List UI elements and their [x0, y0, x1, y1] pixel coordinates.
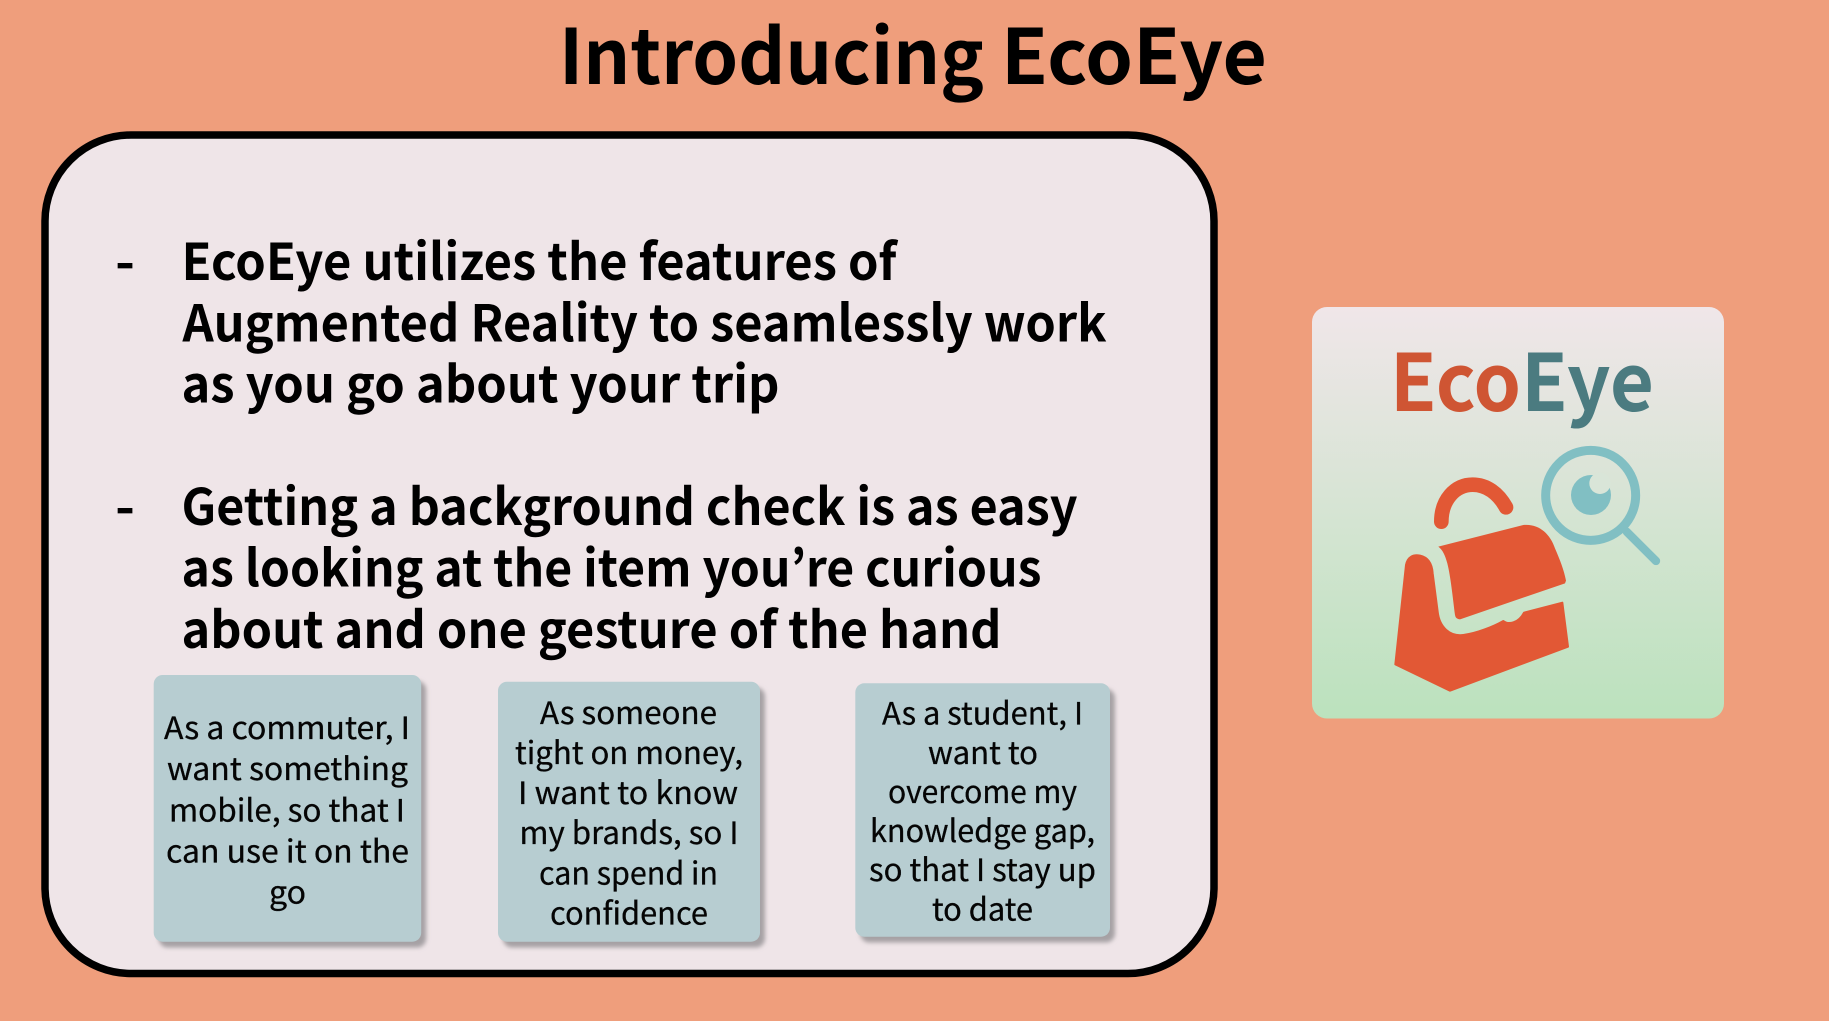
card: student user story: want to: [928, 728, 1038, 773]
text block: second bullet: Getting a background check is as easy: [182, 466, 1078, 540]
card: student user story: knowledge gap,: [870, 806, 1095, 851]
card: commuter user story: can use it on the: [166, 826, 409, 872]
text block: second bullet: -: [115, 466, 135, 540]
panel: main description: [45, 135, 1214, 974]
logo wordmark: EcoEye: [1390, 319, 1654, 434]
card: commuter user story: As a commuter, I: [164, 703, 410, 748]
card: student user story: to date: [932, 884, 1033, 930]
card: tight budget user story: my brands, so I: [520, 808, 738, 853]
text block: second bullet: [115, 466, 1078, 663]
card: tight budget user story: I want to know: [518, 768, 738, 813]
icon: magnifying glass with eye: [1546, 450, 1656, 561]
card: tight budget user story: tight on money,: [515, 728, 743, 773]
card: student user story: [855, 683, 1115, 942]
card: student user story: overcome my: [888, 767, 1077, 812]
title: [559, 0, 1267, 106]
card: commuter user story: want something: [167, 744, 409, 789]
text block: first bullet: as you go about your trip: [182, 344, 780, 418]
card: commuter user story: [154, 675, 426, 948]
logo card: [1312, 307, 1724, 718]
text block: second bullet: as looking at the item you’re curious: [182, 528, 1042, 602]
card: student user story: As a student, I: [882, 688, 1083, 734]
card: tight budget user story: confidence: [550, 888, 708, 934]
text block: second bullet: about and one gesture of the hand: [182, 589, 1002, 663]
icon: handbag: [1395, 485, 1568, 691]
card: tight budget user story: [498, 682, 765, 948]
text block: first bullet: -: [115, 221, 135, 295]
text block: first bullet: [115, 221, 1107, 418]
text block: first bullet: EcoEye utilizes the features of: [182, 221, 899, 295]
card: commuter user story: mobile, so that I: [169, 786, 405, 830]
card: commuter user story: go: [269, 868, 306, 912]
card: tight budget user story: can spend in: [539, 848, 718, 894]
text block: first bullet: Augmented Reality to seamlessly work: [182, 282, 1107, 356]
card: student user story: so that I stay up: [869, 845, 1096, 890]
card: tight budget user story: As someone: [540, 688, 717, 733]
